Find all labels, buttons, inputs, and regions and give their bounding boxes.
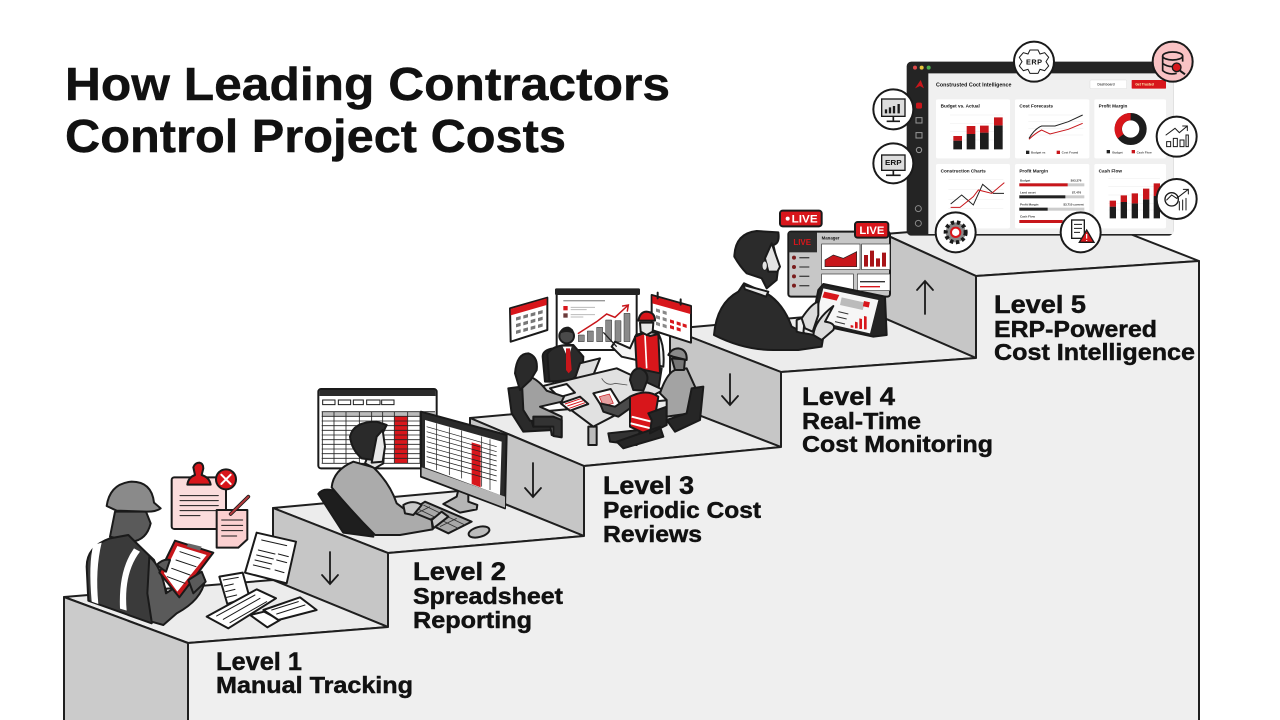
monitor with spreadsheet	[421, 412, 507, 513]
presentation board with growth chart	[555, 288, 640, 350]
card: budget vs actual	[936, 99, 1010, 158]
label: level 5: Cost Intelligence	[994, 339, 1195, 365]
label: level 3: Periodic Cost	[603, 497, 761, 523]
label: level 1: Level 1	[216, 648, 302, 676]
spreadsheet window	[318, 389, 437, 468]
keyboard and mouse	[407, 502, 491, 540]
label: level 3: Level 3	[603, 472, 694, 500]
dashboard header: Construsted Coct Intelligence	[936, 82, 1012, 88]
label: level 1	[216, 648, 413, 698]
step 4 riser	[670, 329, 781, 447]
illustration: level 5 erp dashboard	[873, 42, 1197, 252]
illustration: level 1 manual tracking	[87, 463, 317, 628]
icon: erp monitor badge: ERP	[885, 158, 902, 167]
icon: database search badge	[1153, 42, 1193, 82]
card: cash flow: Cash Flow	[1099, 168, 1122, 173]
dashboard window	[907, 62, 1173, 236]
worker in grey hard hat	[660, 348, 703, 432]
icon: erp gear badge	[1014, 42, 1054, 82]
card: cost forecasts: Cost Found	[1062, 151, 1078, 155]
illustration: level 2 spreadsheet reporting	[318, 389, 507, 540]
card: cost forecasts: Cost Forecasts	[1019, 104, 1053, 109]
live badge: LIVE	[792, 213, 818, 225]
card: budget vs actual: Budget vs. Actual	[941, 104, 980, 109]
icon: alert document badge	[1061, 212, 1101, 252]
businessman	[714, 231, 823, 350]
label: level 5: ERP-Powered	[994, 316, 1157, 342]
card: profit margin bars: $3,710 current	[1063, 202, 1084, 206]
live dashboard panel: LIVE	[793, 238, 812, 247]
foreman presenting in red vest	[603, 312, 664, 390]
step 3 top surface	[470, 400, 781, 466]
step 1 side face	[64, 597, 188, 720]
icon: gear badge	[936, 212, 976, 252]
step 4 top surface	[670, 310, 976, 372]
illustration: level 4 real-time cost monitoring	[714, 211, 890, 350]
office chair	[318, 490, 373, 537]
step 2 riser	[273, 508, 388, 627]
sidebar icons	[915, 80, 924, 226]
label: level 2: Reporting	[413, 607, 532, 633]
live dashboard panel	[788, 232, 890, 297]
worker with clipboard	[87, 482, 213, 625]
dashboard header: Get Trusted	[1135, 83, 1154, 87]
label: level 4: Level 4	[802, 383, 895, 411]
step 5 riser	[884, 234, 976, 358]
illustration: level 3 periodic cost reviews	[508, 288, 703, 448]
tablet	[802, 284, 887, 340]
card: profit margin donut	[1094, 99, 1166, 158]
staircase structure	[64, 225, 1199, 720]
card: cash flow	[1094, 164, 1166, 228]
icon: left calendar	[510, 298, 547, 342]
dashboard header	[936, 80, 1166, 89]
label: level 2: Level 2	[413, 558, 506, 586]
meeting table with papers	[540, 368, 663, 445]
title: How Leading Contractors	[65, 58, 670, 110]
arrow: step 5 up	[917, 281, 933, 314]
icon: monitor chart badge	[873, 89, 913, 129]
step 2 top surface	[273, 490, 584, 553]
arrow: step 3 down	[525, 463, 541, 497]
card: profit margin bars: $7,476	[1072, 190, 1081, 194]
icon: erp gear badge: ERP	[1026, 57, 1042, 66]
card: profit margin bars: Land asset	[1020, 190, 1036, 194]
live dashboard panel: Manager	[822, 235, 840, 240]
staircase front face	[188, 261, 1199, 720]
card: profit margin bars: Budget	[1020, 178, 1030, 182]
step 5 top surface	[884, 225, 1199, 276]
person at desk	[332, 422, 448, 535]
dashboard header: Dashboard	[1097, 83, 1115, 87]
card: cost forecasts: Budget vs	[1031, 151, 1046, 155]
label: level 5: Level 5	[994, 291, 1086, 319]
seated woman	[508, 353, 564, 437]
icon: clipped pink document with error mark	[172, 463, 248, 548]
card: profit margin bars: Cash Flow	[1020, 214, 1036, 218]
label: level 4	[802, 383, 993, 457]
card: profit margin bars: Profit Margin	[1020, 202, 1039, 206]
card: profit margin donut: Profit Margin	[1099, 104, 1128, 109]
step 3 riser	[470, 418, 584, 536]
title	[65, 58, 670, 162]
icon: erp monitor badge	[873, 143, 913, 183]
arrow: step 4 down	[722, 374, 738, 405]
live badge	[855, 222, 888, 238]
live badge	[780, 211, 822, 226]
label: level 4: Cost Monitoring	[802, 431, 993, 457]
label: level 2	[413, 558, 563, 633]
seated manager with laptop	[543, 327, 600, 382]
card: profit margin bars: $93,376	[1071, 178, 1082, 182]
icon: growth chart badge	[1157, 117, 1197, 157]
worker in red vest from behind	[600, 368, 667, 448]
label: level 4: Real-Time	[802, 408, 921, 434]
arrow: step 2 down	[322, 552, 338, 584]
step 1 top surface	[64, 580, 388, 643]
icon: analytics trend badge	[1157, 179, 1197, 219]
card: construction charts	[936, 164, 1010, 228]
title: Control Project Costs	[65, 110, 566, 162]
card: construction charts: Construction Charts	[941, 168, 986, 173]
live badge: LIVE	[859, 225, 884, 237]
card: profit margin bars: Profit Margin	[1019, 168, 1048, 173]
label: level 3	[603, 472, 761, 547]
card: profit margin bars	[1015, 164, 1089, 228]
card: cost forecasts	[1015, 99, 1089, 158]
label: level 3: Reviews	[603, 521, 702, 547]
label: level 2: Spreadsheet	[413, 583, 563, 609]
icon: scattered receipts	[207, 533, 317, 628]
label: level 1: Manual Tracking	[216, 672, 413, 698]
label: level 5	[994, 291, 1195, 365]
card: profit margin donut: Cash Flow	[1137, 150, 1152, 154]
icon: right calendar	[652, 293, 691, 343]
card: profit margin donut: Budget	[1112, 150, 1123, 154]
